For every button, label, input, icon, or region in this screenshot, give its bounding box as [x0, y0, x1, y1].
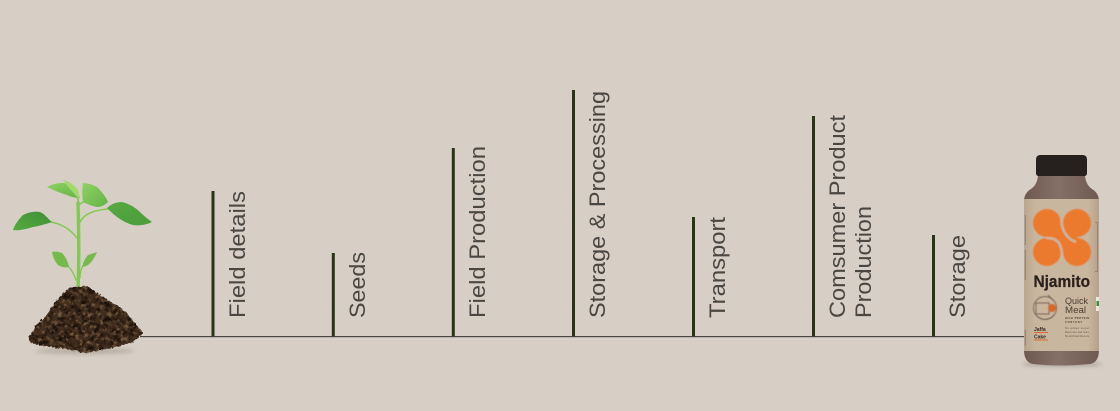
- logo cutouts: [1047, 208, 1075, 267]
- step: Seeds: Seeds: [345, 252, 370, 318]
- product bottle: No added sugar: [1065, 327, 1089, 330]
- product name: Quick: [1065, 296, 1088, 306]
- step: Storage & Processing: [572, 90, 610, 336]
- product bottle: Real nuts and more: [1065, 331, 1090, 334]
- step: Field Production: Field Production: [465, 146, 490, 318]
- step: Field details: [212, 191, 250, 336]
- step: Field Production: [452, 146, 490, 336]
- soil shadow: [35, 348, 135, 354]
- logo mark: [1033, 208, 1091, 267]
- bottle cap: [1036, 155, 1087, 176]
- bottle shadow: [1022, 362, 1102, 366]
- step: Transport: [692, 216, 730, 336]
- plant leaves: [13, 180, 152, 267]
- step: Comsumer Product Production: [812, 114, 876, 336]
- step: Seeds: [332, 252, 370, 336]
- step: Storage & Processing: Storage & Processing: [585, 91, 610, 318]
- step: Storage: Storage: [945, 235, 970, 318]
- plant illustration: [13, 180, 152, 354]
- brand name: Njamito: [1034, 272, 1090, 291]
- step: Comsumer Product Production: Production: [851, 206, 876, 318]
- side label copy: [1025, 215, 1098, 346]
- step: Field details: Field details: [225, 191, 250, 318]
- product bottle: Cake: [1034, 334, 1046, 340]
- soil mound: [28, 286, 143, 353]
- product claims: HIGH PROTEIN: [1065, 316, 1089, 320]
- product bottle: No artificial flavours: [1065, 335, 1090, 338]
- bottle body: [1024, 176, 1099, 366]
- flavour name: Jaffa: [1034, 327, 1046, 333]
- organic badge: [1096, 297, 1099, 311]
- timeline baseline: [140, 336, 1026, 337]
- product bottle: Meal: [1065, 305, 1086, 315]
- meal illustration: [1034, 295, 1056, 320]
- step: Comsumer Product Production: Comsumer Product: [825, 114, 850, 318]
- step: Transport: Transport: [705, 216, 730, 318]
- bottle label: [1024, 199, 1099, 351]
- product bottle: CONTENT: [1065, 320, 1082, 324]
- plant stem and branches: [51, 190, 108, 289]
- step: Storage: [932, 235, 970, 336]
- product bottle: [1022, 155, 1102, 366]
